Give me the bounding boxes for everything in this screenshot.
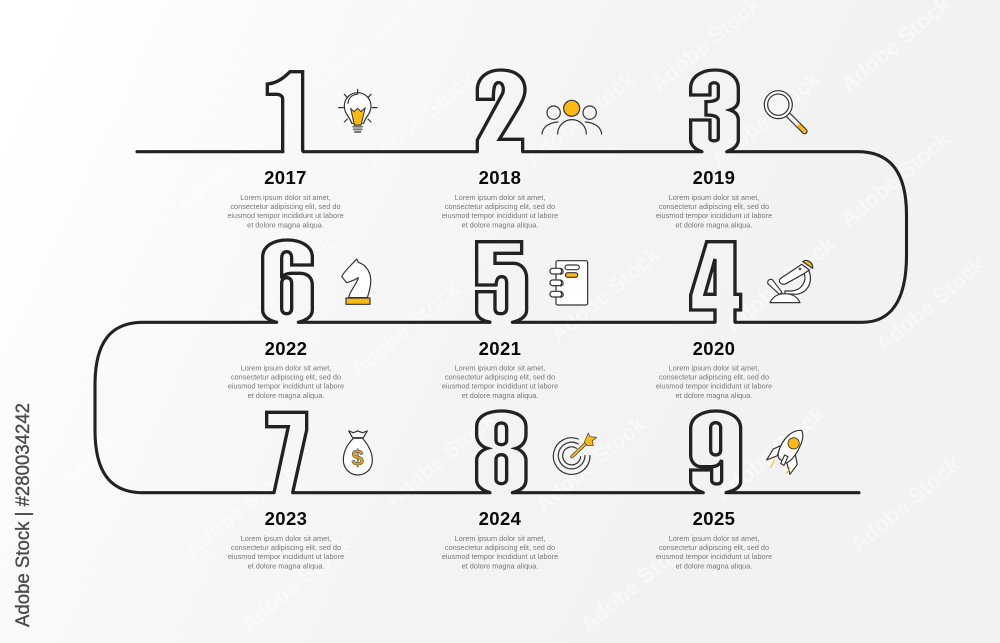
- digit 6: [263, 240, 312, 322]
- step 1 text: 2017: 2017: [264, 167, 307, 188]
- step 2 text: 2018: consectetur adipiscing elit, sed do: [445, 202, 555, 211]
- step 3 text: 2019: consectetur adipiscing elit, sed do: [659, 202, 769, 211]
- watermarks: Adobe Stock: [846, 451, 965, 557]
- watermarks: Adobe Stock: [221, 231, 340, 337]
- watermarks: Adobe Stock: [546, 241, 665, 347]
- step 4 text: 2020: [656, 338, 772, 400]
- step 7 text: 2023: [228, 508, 344, 570]
- step 6 text: 2022: et dolore magna aliqua.: [248, 391, 324, 400]
- step 3 text: 2019: et dolore magna aliqua.: [676, 220, 752, 229]
- watermarks: Adobe Stock: [181, 456, 300, 562]
- watermarks: Adobe Stock: [836, 126, 955, 232]
- step 8 text: 2024: Lorem ipsum dolor sit amet,: [455, 534, 545, 543]
- icon: notebook: [550, 261, 588, 305]
- step 4 text: 2020: 2020: [693, 338, 735, 359]
- step 9 text: 2025: consectetur adipiscing elit, sed do: [659, 543, 769, 552]
- watermarks: Adobe Stock: [346, 276, 465, 382]
- step 1 text: 2017: et dolore magna aliqua.: [247, 220, 324, 229]
- step 4 text: 2020: et dolore magna aliqua.: [676, 391, 752, 400]
- watermarks: Adobe Stock: [46, 66, 165, 172]
- step 8 text: 2024: consectetur adipiscing elit, sed do: [445, 543, 555, 552]
- watermarks: Adobe Stock: [531, 411, 650, 517]
- step 6 text: 2022: eiusmod tempor incididunt ut labore: [228, 382, 344, 391]
- watermarks: Adobe Stock: [11, 266, 130, 372]
- digit 9 counter: [711, 423, 721, 455]
- step 7 text: 2023: eiusmod tempor incididunt ut labore: [228, 552, 344, 561]
- step 7 text: 2023: 2023: [265, 508, 307, 529]
- digit 8 upper counter: [496, 423, 507, 445]
- watermarks: Adobe Stock: [236, 531, 355, 637]
- step 9 text: 2025: [656, 508, 772, 570]
- step 1 text: 2017: Lorem ipsum dolor sit amet,: [240, 193, 331, 202]
- step 2 text: 2018: eiusmod tempor incididunt ut labore: [442, 211, 558, 220]
- step 4 text: 2020: eiusmod tempor incididunt ut labore: [656, 382, 772, 391]
- digit 1: [267, 72, 303, 152]
- watermarks: Adobe Stock: [361, 66, 480, 172]
- icon: chess knight: [342, 259, 371, 304]
- step 1 text: 2017: consectetur adipiscing elit, sed do: [230, 202, 341, 211]
- step 5 text: 2021: [442, 338, 558, 400]
- step 5 text: 2021: et dolore magna aliqua.: [462, 391, 538, 400]
- step 5 text: 2021: 2021: [479, 338, 521, 359]
- step 9 text: 2025: 2025: [693, 508, 735, 529]
- icon: money bag: [343, 431, 372, 475]
- watermarks: Adobe Stock: [871, 251, 990, 357]
- step 1 text: 2017: eiusmod tempor incididunt ut labore: [227, 211, 344, 220]
- step 7 text: 2023: Lorem ipsum dolor sit amet,: [241, 534, 331, 543]
- icon: magnifier: [764, 91, 805, 131]
- watermarks: Adobe Stock: [56, 386, 175, 492]
- watermarks: Adobe Stock: [521, 66, 640, 172]
- step 3 text: 2019: [656, 167, 772, 229]
- watermarks: Adobe Stock: [706, 66, 825, 172]
- step 6 text: 2022: [228, 338, 344, 400]
- step 2 text: 2018: [442, 167, 558, 229]
- icon: rocket: [767, 430, 803, 474]
- digit 8 lower counter: [496, 455, 507, 484]
- digit 8: [477, 411, 526, 493]
- digit 5: [477, 242, 527, 322]
- digit 7: [267, 412, 307, 493]
- step 7 text: 2023: et dolore magna aliqua.: [248, 561, 324, 570]
- step 6 text: 2022: Lorem ipsum dolor sit amet,: [241, 364, 331, 372]
- watermarks: Adobe Stock: [711, 401, 830, 507]
- step 8 text: 2024: eiusmod tempor incididunt ut labore: [442, 552, 558, 561]
- digit 9: [691, 411, 741, 493]
- watermarks: Adobe Stock: [576, 531, 695, 637]
- step 2 text: 2018: Lorem ipsum dolor sit amet,: [455, 193, 545, 202]
- step 2 text: 2018: et dolore magna aliqua.: [462, 220, 538, 229]
- icon: light bulb: [339, 89, 377, 132]
- step 8 text: 2024: 2024: [479, 508, 522, 529]
- icon: target: [553, 433, 597, 474]
- step 5 text: 2021: Lorem ipsum dolor sit amet,: [455, 364, 545, 372]
- step 3 text: 2019: eiusmod tempor incididunt ut labore: [656, 211, 772, 220]
- step 8 text: 2024: [442, 508, 558, 570]
- step 4 text: 2020: consectetur adipiscing elit, sed do: [659, 372, 769, 382]
- step 8 text: 2024: et dolore magna aliqua.: [462, 561, 538, 570]
- step 5 text: 2021: consectetur adipiscing elit, sed do: [445, 372, 555, 382]
- step 7 text: 2023: consectetur adipiscing elit, sed do: [231, 543, 341, 552]
- digit 4 counter: [705, 259, 715, 294]
- step 6 text: 2022: consectetur adipiscing elit, sed do: [231, 372, 341, 382]
- digit 6 counter: [282, 278, 292, 314]
- watermarks: Adobe Stock: [171, 111, 290, 217]
- digit 4: [691, 242, 741, 322]
- icon: microscope: [768, 260, 813, 303]
- step 5 text: 2021: eiusmod tempor incididunt ut labore: [442, 382, 558, 391]
- timeline connector line: [95, 152, 906, 493]
- step 2 text: 2018: 2018: [479, 167, 521, 188]
- step 9 text: 2025: eiusmod tempor incididunt ut labore: [656, 552, 772, 561]
- side stock id label: Adobe Stock | #280034242: [13, 403, 34, 627]
- step 6 text: 2022: 2022: [265, 338, 307, 359]
- icon: team: [542, 100, 602, 134]
- step 3 text: 2019: 2019: [693, 167, 735, 188]
- watermarks: Adobe Stock: [381, 406, 500, 512]
- digit 3: [691, 70, 738, 152]
- step 1 text: 2017: [227, 167, 344, 229]
- icon: money bag: $: [352, 446, 364, 471]
- step 3 text: 2019: Lorem ipsum dolor sit amet,: [669, 193, 759, 202]
- digit 2: [477, 70, 525, 152]
- step 9 text: 2025: et dolore magna aliqua.: [676, 561, 752, 570]
- step 9 text: 2025: Lorem ipsum dolor sit amet,: [669, 534, 759, 543]
- watermarks: Adobe Stock: [721, 231, 840, 337]
- step 4 text: 2020: Lorem ipsum dolor sit amet,: [669, 364, 759, 372]
